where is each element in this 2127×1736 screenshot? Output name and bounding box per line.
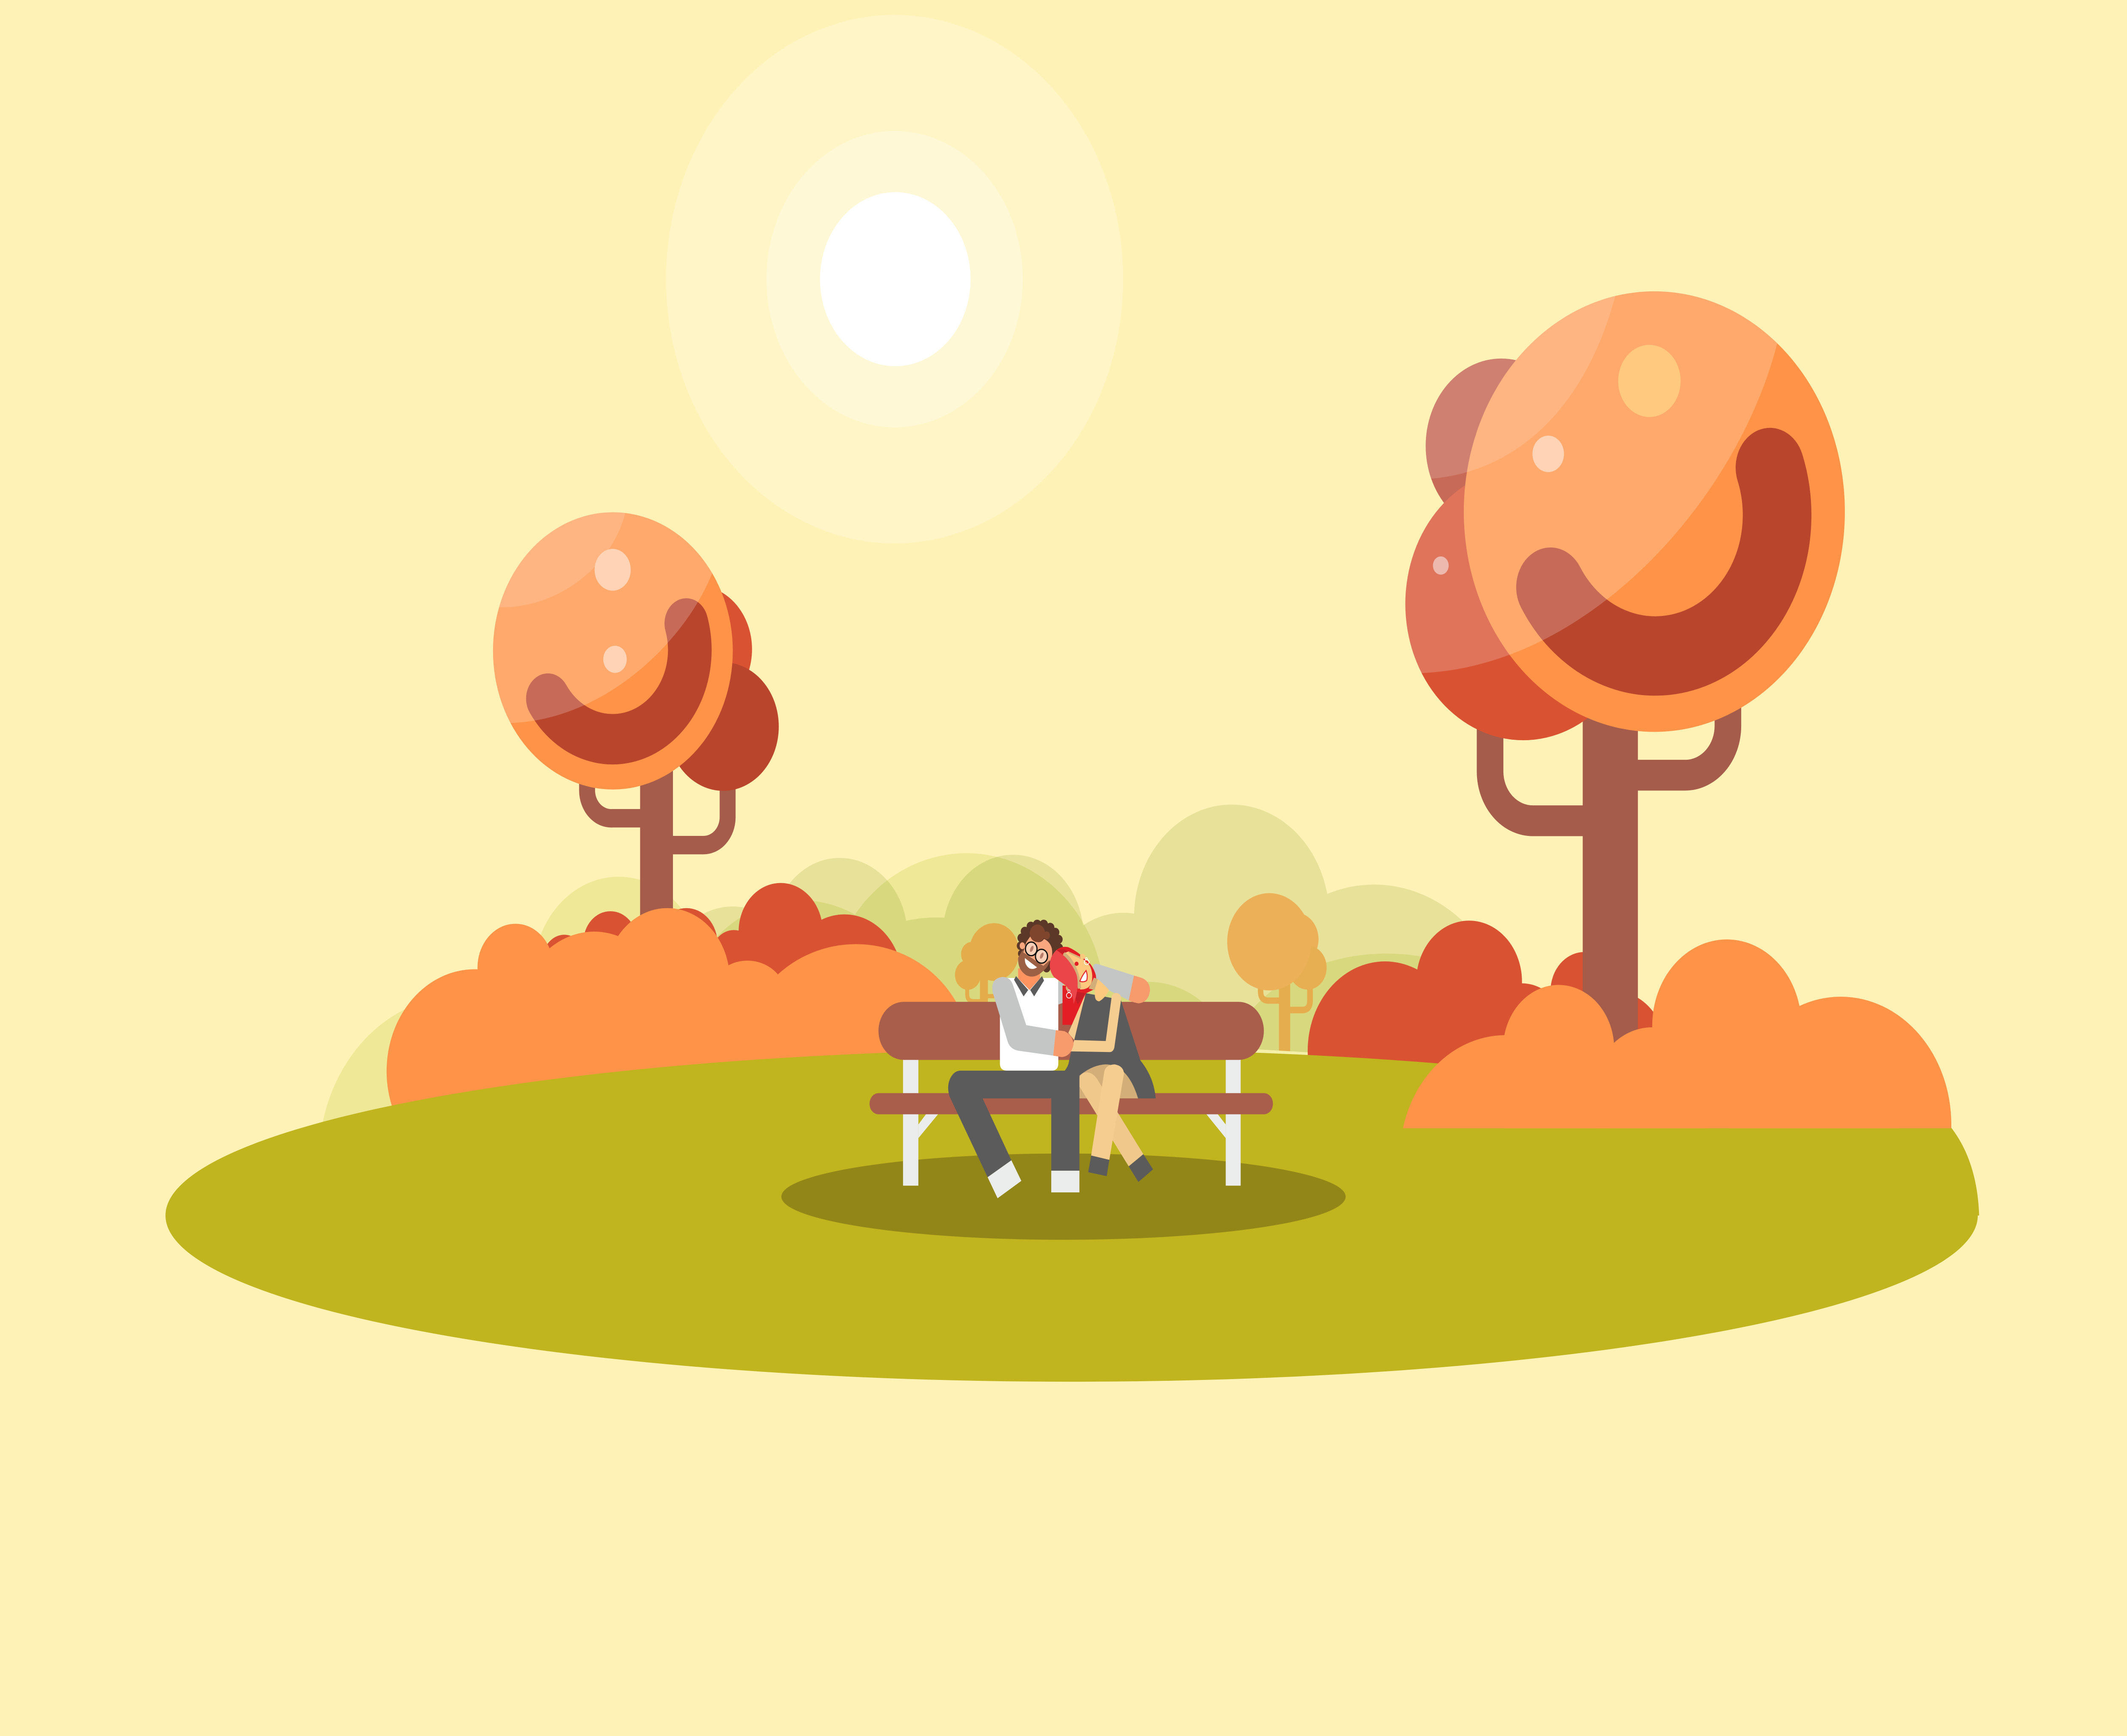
foliage dots — [1433, 345, 1681, 575]
main foliage — [1464, 291, 1845, 732]
man: trousers and socks — [948, 1071, 1079, 1198]
woman: mouth — [1080, 971, 1087, 982]
front leg — [1091, 1064, 1124, 1160]
woman: arm — [1068, 993, 1121, 1052]
man: face — [1023, 937, 1052, 966]
crescent shadow — [1551, 467, 1777, 656]
woman: eye — [1075, 962, 1078, 966]
bench seat — [870, 1093, 1273, 1115]
upper bodies — [992, 920, 1150, 1057]
woman: back hair — [1063, 986, 1086, 1025]
main foliage — [493, 512, 733, 790]
woman: face — [1063, 952, 1092, 989]
man: far sleeve shoulder — [1058, 981, 1064, 1005]
man: smile — [1025, 958, 1037, 969]
left orange bush — [387, 908, 971, 1173]
tree branches — [587, 777, 727, 845]
woman: earrings — [1066, 958, 1089, 998]
scene: autumn park — [165, 15, 1979, 1382]
bench legs — [903, 1051, 1240, 1186]
far hills — [662, 804, 1514, 1208]
foliage dots — [595, 549, 631, 673]
man: ear — [1020, 942, 1025, 949]
tree trunk — [1583, 692, 1638, 1095]
left red bush — [543, 883, 903, 1049]
big tree — [1406, 291, 1845, 1043]
bench backrest — [878, 1002, 1264, 1060]
man: hair front — [1030, 924, 1050, 942]
ground — [165, 1049, 1979, 1382]
man: collar — [1014, 976, 1044, 996]
man: near sleeve — [992, 977, 1056, 1056]
man: far sleeve — [1093, 964, 1134, 1001]
sun — [666, 15, 1123, 544]
front shoe — [1088, 1155, 1109, 1176]
left sock — [988, 1160, 1021, 1198]
woman: ears — [1066, 953, 1086, 991]
tree trunk — [640, 761, 673, 950]
skirt lining — [1079, 1064, 1138, 1098]
crescent shadow — [548, 624, 690, 739]
background tree: right — [1227, 893, 1327, 1053]
back foliage — [1406, 359, 1641, 740]
bench shadow — [781, 1154, 1346, 1240]
right orange bush — [1400, 939, 1951, 1280]
man: shirt — [1000, 978, 1058, 1071]
man: curly hair — [1017, 920, 1063, 972]
back shoe — [1129, 1154, 1153, 1182]
man: beard — [1018, 949, 1050, 977]
thin light strip beside bench — [1228, 1048, 1309, 1057]
man: near hand — [1053, 1030, 1074, 1057]
woman: light hair — [1050, 950, 1078, 1004]
woman: face shading — [1064, 952, 1098, 990]
right red bush — [1308, 921, 1666, 1140]
background tree: left — [955, 923, 1019, 1012]
woman: hair shading — [1056, 949, 1086, 1005]
small tree — [493, 512, 779, 915]
man: far hand — [1129, 975, 1150, 1003]
man: neck — [1018, 969, 1040, 990]
back foliage — [642, 585, 779, 791]
trousers — [948, 1071, 1079, 1177]
back leg — [1079, 1072, 1143, 1166]
near hills — [319, 853, 1549, 1325]
bench — [870, 1002, 1273, 1186]
woman: dress and legs — [1063, 993, 1156, 1182]
right sock — [1051, 1171, 1079, 1192]
foliage highlights — [493, 512, 712, 723]
woman: top hair — [1056, 947, 1096, 993]
couple — [948, 920, 1156, 1198]
dress — [1063, 993, 1156, 1098]
foliage highlights — [1347, 255, 1807, 673]
tree branches — [1490, 704, 1728, 821]
woman: neck — [1095, 979, 1109, 1001]
man: glasses — [1026, 942, 1047, 963]
